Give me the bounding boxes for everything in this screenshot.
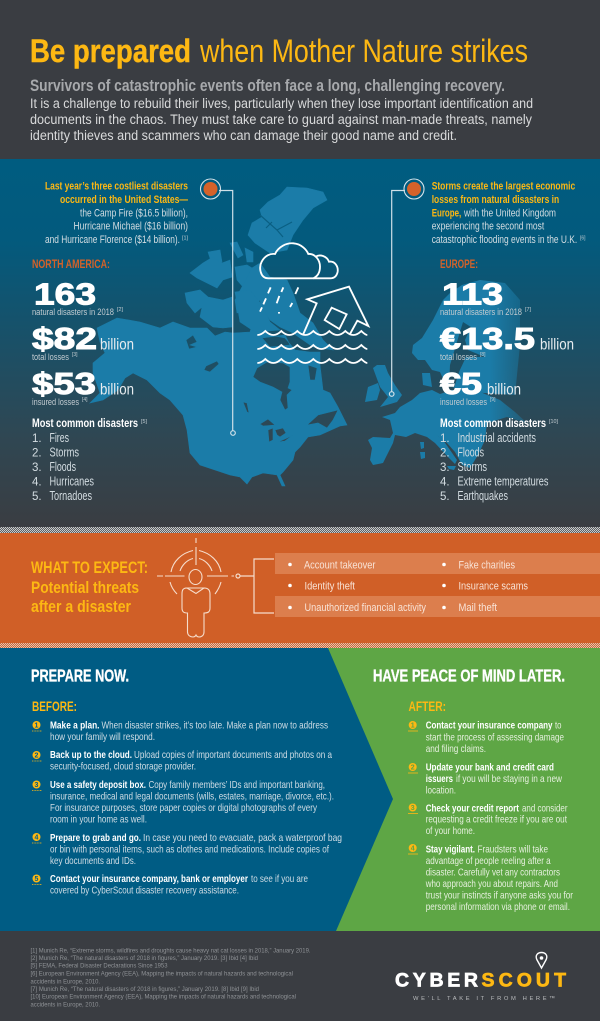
callout: Europe storms bbox=[432, 180, 586, 246]
marker: left callout bbox=[200, 179, 220, 199]
list: most common disasters: Tornadoes bbox=[50, 489, 92, 503]
connector bracket bbox=[236, 559, 274, 613]
footnotes: [5] FEMA, Federal Disaster Declarations Since 1953 bbox=[30, 963, 168, 970]
step 4 before: or bin with personal items, such as clothes and medications. Include copies of bbox=[50, 845, 329, 856]
stat: Europe total losses bbox=[440, 321, 574, 363]
step 5 before bbox=[32, 874, 308, 897]
list: Europe most common disasters: 5. bbox=[440, 491, 450, 503]
step 4 after: Fraudsters will take bbox=[478, 844, 548, 855]
list: Europe most common disasters: Earthquakes bbox=[458, 489, 508, 503]
intro text: identity thieves and scammers who can damage their good name and credit. bbox=[30, 128, 457, 144]
step 1 after: 1 bbox=[411, 722, 415, 730]
step 2 after: if you will be staying in a new bbox=[456, 774, 562, 785]
step 4 before: In case you need to evacuate, pack a waterproof bag bbox=[143, 833, 342, 844]
step 2 before: 2 bbox=[35, 752, 39, 760]
stat: Europe insured losses: €5 bbox=[440, 366, 482, 401]
step 3 before: insurance, medical and legal documents (wills, estates, marriage, divorce, etc.). bbox=[50, 792, 334, 803]
stat: insured losses: insured losses bbox=[32, 397, 79, 408]
callout: Europe storms: [6] bbox=[580, 236, 586, 242]
callout: United States disasters: [1] bbox=[182, 236, 189, 242]
stat: total losses: total losses bbox=[32, 352, 69, 363]
threat list: Insurance scams bbox=[458, 580, 528, 592]
list: most common disasters: Most common disasters bbox=[32, 416, 138, 430]
step 2 after bbox=[408, 762, 562, 796]
step 2 after: location. bbox=[426, 785, 456, 796]
step 3 before: 3 bbox=[35, 782, 39, 789]
list: Europe most common disasters: 2. bbox=[440, 448, 450, 460]
stat: insured losses: [4] bbox=[82, 397, 88, 403]
heading: potential threats bbox=[31, 559, 148, 616]
step 4 after: disaster. Carefully vet any contractors bbox=[426, 867, 560, 878]
stat: Europe disasters count: [7] bbox=[525, 307, 532, 313]
stat: Europe total losses: total losses bbox=[440, 352, 477, 363]
step 2 before: security-focused, cloud storage provider. bbox=[50, 762, 196, 773]
list: most common disasters: Floods bbox=[50, 460, 76, 474]
list: Europe most common disasters: Industrial accidents bbox=[458, 431, 536, 445]
list: most common disasters: 2. bbox=[32, 448, 42, 460]
callout: United States disasters: Last year’s three costliest disasters bbox=[45, 180, 188, 192]
stat: Europe disasters count bbox=[440, 276, 532, 318]
heading: North America: NORTH AMERICA: bbox=[32, 257, 110, 271]
header panel bbox=[0, 0, 600, 159]
stat: disasters count: [2] bbox=[117, 307, 124, 313]
step 2 before: Back up to the cloud. bbox=[50, 750, 132, 761]
list: Europe most common disasters: 3. bbox=[440, 462, 450, 474]
step 5 before: 5 bbox=[35, 876, 39, 883]
threat list: Account takeover bbox=[304, 560, 376, 572]
step 3 after: Check your credit report bbox=[426, 803, 519, 814]
subtitle: Survivors of catastrophic events often face a long, challenging recovery. bbox=[30, 77, 505, 95]
step 4 before: Prepare to grab and go. bbox=[50, 833, 141, 844]
footnotes: [2] Munich Re, “The natural disasters of 2018 in figures,” January 2019. [3] Ibid [4] Ibid bbox=[30, 955, 258, 962]
subheading: after: AFTER: bbox=[408, 699, 446, 714]
step 3 before bbox=[32, 780, 334, 826]
step 4 before bbox=[32, 833, 342, 867]
stat: total losses: $82 bbox=[32, 321, 97, 356]
stat: disasters count bbox=[32, 276, 124, 318]
step 1 before: When disaster strikes, it’s too late. Make a plan now to address bbox=[102, 721, 328, 732]
callout: Europe storms: losses from natural disasters in bbox=[432, 194, 559, 206]
footnotes: [6] European Environment Agency (EEA), Mapping the impacts of natural hazards and technological bbox=[30, 971, 293, 978]
stat: Europe insured losses bbox=[440, 366, 521, 408]
list: most common disasters bbox=[32, 416, 148, 503]
step 4 after: who approach you about repairs. And bbox=[425, 879, 558, 890]
intro text bbox=[30, 96, 533, 144]
stat: Europe insured losses: [9] bbox=[490, 397, 496, 403]
list: most common disasters: Storms bbox=[50, 446, 79, 460]
title: Be prepared bbox=[30, 33, 191, 69]
list: Europe most common disasters: 1. bbox=[440, 433, 450, 445]
map: Arctic channels bbox=[260, 215, 292, 237]
step 4 before: key documents and IDs. bbox=[50, 856, 136, 867]
list: most common disasters: 5. bbox=[32, 491, 42, 503]
list: Europe most common disasters: Most common disasters bbox=[440, 416, 546, 430]
step 1 before: how your family will respond. bbox=[50, 732, 155, 743]
list: Europe most common disasters: Extreme temperatures bbox=[458, 474, 548, 488]
step 1 after: start the process of assessing damage bbox=[426, 732, 564, 744]
stat: total losses: billion bbox=[100, 336, 134, 354]
heading: Europe: EUROPE: bbox=[440, 257, 478, 271]
marker: right callout bbox=[404, 179, 424, 199]
panel: what to expect bbox=[0, 533, 600, 643]
step 5 before: Contact your insurance company, bank or employer bbox=[50, 874, 248, 885]
step 1 after: and filing claims. bbox=[426, 744, 486, 755]
intro text: documents in the chaos. They must take care to guard against man-made threats, namely bbox=[30, 112, 533, 128]
step 3 after: of your home. bbox=[426, 826, 475, 837]
subheading: before: BEFORE: bbox=[32, 699, 77, 714]
step 2 before bbox=[32, 750, 332, 773]
stat: insured losses bbox=[32, 366, 134, 408]
heading: potential threats: WHAT TO EXPECT: bbox=[31, 559, 148, 577]
icon: storm, flooded house bbox=[257, 243, 368, 363]
list: Europe most common disasters: 4. bbox=[440, 476, 450, 488]
step 1 after: to bbox=[555, 721, 562, 732]
North America statistics bbox=[32, 257, 148, 503]
callout: Europe storms: experiencing the second most bbox=[432, 220, 545, 232]
threat list: Fake charities bbox=[458, 560, 515, 572]
stat: insured losses: $53 bbox=[32, 366, 96, 401]
Europe statistics bbox=[440, 257, 574, 503]
step 2 after: 2 bbox=[411, 764, 415, 772]
logo: CyberScout: WE’LL TAKE IT FROM HERE™ bbox=[413, 996, 555, 1002]
stat: Europe insured losses: billion bbox=[487, 382, 521, 398]
step 3 before: room in your home as well. bbox=[50, 814, 147, 826]
footnotes: [7] Munich Re, “The natural disasters of 2018 in figures,” January 2019. [8] Ibid [9] Ibid bbox=[30, 986, 259, 993]
step 3 after: 3 bbox=[411, 805, 415, 812]
step 4 after bbox=[408, 844, 573, 913]
step 3 before: For insurance purposes, store paper copies or digital photographs of every bbox=[50, 803, 318, 814]
heading: prepare now: PREPARE NOW. bbox=[31, 666, 129, 686]
threat list: Identity theft bbox=[304, 580, 356, 592]
step 5 before: to see if you are bbox=[251, 874, 308, 885]
stat: Europe disasters count: natural disasters in 2018 bbox=[440, 307, 522, 318]
step 4 after: 4 bbox=[411, 846, 415, 852]
stat: Europe total losses: [8] bbox=[480, 352, 486, 358]
list: Europe most common disasters: [10] bbox=[549, 419, 559, 425]
step 1 after: Contact your insurance company bbox=[426, 721, 553, 732]
stat: Europe total losses: €13.5 bbox=[440, 321, 535, 356]
step 4 before: 4 bbox=[35, 834, 39, 842]
list: Europe most common disasters: Floods bbox=[458, 446, 484, 460]
logo: CyberScout: SCOUT bbox=[482, 970, 566, 992]
footnotes: accidents in Europe, 2010. bbox=[30, 978, 100, 985]
icon: person in crosshair bbox=[157, 538, 234, 637]
step 1 after bbox=[408, 721, 564, 755]
threat list: Unauthorized financial activity bbox=[304, 602, 426, 614]
list: Europe most common disasters bbox=[440, 416, 559, 503]
panel: world map statistics bbox=[0, 159, 600, 527]
step 3 before: Use a safety deposit box. bbox=[50, 780, 146, 791]
heading: potential threats: Potential threats bbox=[31, 579, 139, 597]
callout: United States disasters: the Camp Fire ($16.5 billion), bbox=[80, 207, 188, 219]
stat: Europe insured losses: insured losses bbox=[440, 397, 487, 408]
footnotes: accidents in Europe, 2010. bbox=[30, 1001, 100, 1008]
stat: Europe total losses: billion bbox=[540, 336, 574, 354]
panel: footer bbox=[0, 931, 600, 1021]
stat: Europe disasters count: 113 bbox=[442, 276, 503, 312]
connector: United Kingdom bbox=[389, 190, 405, 396]
logo: CyberScout bbox=[395, 952, 566, 1002]
step 3 before: Copy family members’ IDs and important banking, bbox=[148, 780, 325, 791]
list: most common disasters: Hurricanes bbox=[50, 474, 94, 488]
stat: disasters count: natural disasters in 2018 bbox=[32, 307, 114, 318]
stat: total losses: [3] bbox=[72, 352, 78, 358]
list: most common disasters: [5] bbox=[141, 419, 148, 425]
heading: potential threats: after a disaster bbox=[31, 598, 131, 616]
step 4 after: Stay vigilant. bbox=[426, 844, 475, 855]
connector: United States bbox=[219, 190, 235, 435]
logo: CyberScout: CYBER bbox=[395, 970, 478, 992]
threat list: Mail theft bbox=[458, 602, 498, 614]
threat list bbox=[275, 553, 600, 617]
callout: United States disasters bbox=[45, 180, 189, 246]
step 1 before bbox=[32, 721, 328, 743]
step 1 before: Make a plan. bbox=[50, 721, 100, 732]
list: most common disasters: 3. bbox=[32, 462, 42, 474]
list: Europe most common disasters: Storms bbox=[458, 460, 487, 474]
callout: United States disasters: Hurricane Michael ($16 billion) bbox=[74, 220, 188, 232]
step 2 before: Upload copies of important documents and photos on a bbox=[134, 750, 332, 761]
callout: Europe storms: with the United Kingdom bbox=[463, 207, 556, 219]
panel: prepare now bbox=[0, 648, 600, 931]
callout: United States disasters: and Hurricane Florence ($14 billion). bbox=[45, 234, 180, 246]
title bbox=[30, 33, 528, 69]
stat: disasters count: 163 bbox=[34, 276, 96, 312]
title: when Mother Nature strikes bbox=[199, 33, 528, 69]
footnotes bbox=[30, 947, 311, 1008]
step 2 after: Update your bank and credit card bbox=[426, 762, 554, 773]
list: most common disasters: Fires bbox=[50, 431, 69, 445]
map: Europe bbox=[365, 280, 527, 470]
step 5 before: covered by CyberScout disaster recovery assistance. bbox=[50, 886, 239, 897]
step 1 before: 1 bbox=[35, 722, 39, 730]
intro text: It is a challenge to rebuild their lives, particularly when they lose important identification and bbox=[30, 96, 533, 112]
list: most common disasters: 1. bbox=[32, 433, 42, 445]
list: most common disasters: 4. bbox=[32, 476, 42, 488]
map: North America bbox=[90, 187, 347, 486]
stat: insured losses: billion bbox=[100, 382, 134, 398]
panel: peace of mind bbox=[373, 666, 573, 913]
step 3 after bbox=[408, 803, 568, 837]
footnotes: [1] Munich Re, “Extreme storms, wildfires and droughts cause heavy nat cat losses in 2018,” January 2019. bbox=[30, 947, 311, 954]
stat: total losses bbox=[32, 321, 134, 363]
step 4 after: advantage of people reeling after a bbox=[426, 856, 551, 867]
callout: Europe storms: Europe, bbox=[432, 207, 461, 219]
callout: United States disasters: occurred in the United States— bbox=[60, 194, 188, 206]
step 2 after: issuers bbox=[426, 774, 453, 785]
step 3 after: and consider bbox=[522, 803, 568, 814]
footnotes: [10] European Environment Agency (EEA), Mapping the impacts of natural hazards and technological bbox=[30, 994, 297, 1001]
